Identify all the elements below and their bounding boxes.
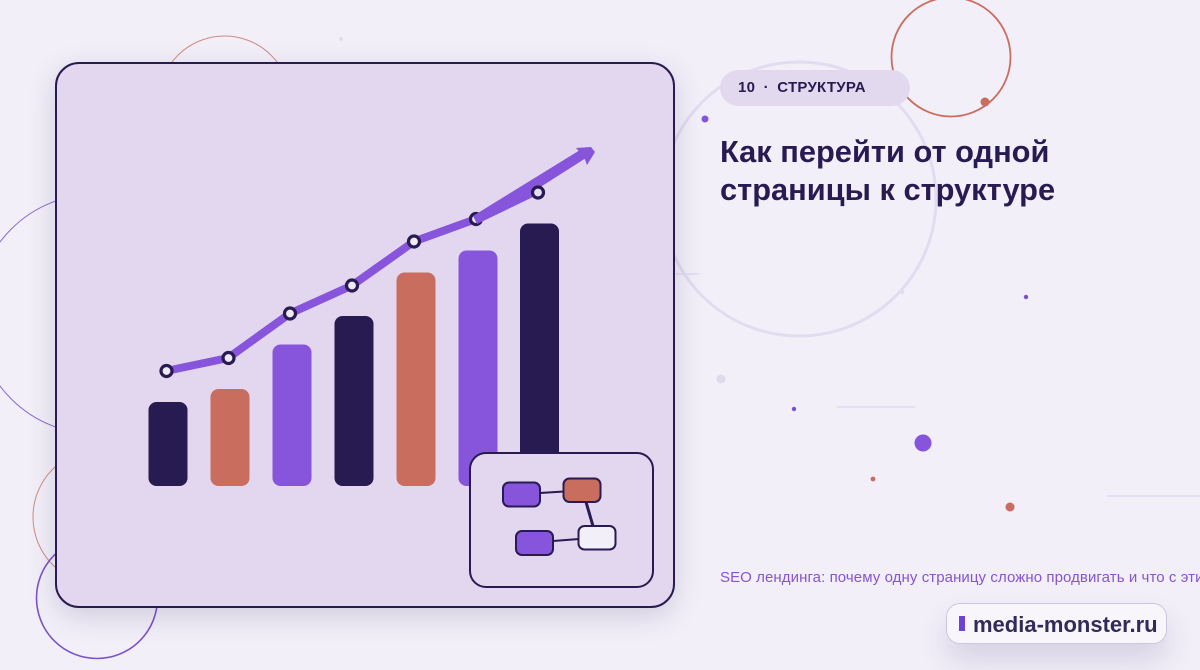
- panel: chart illustration: [55, 62, 675, 608]
- badge: section label: [720, 70, 910, 106]
- scattered dots: [339, 37, 1028, 512]
- nodes: [503, 478, 616, 555]
- purple circle left: [0, 194, 216, 434]
- coral circle behind panel top: [158, 36, 290, 168]
- title: страницы к структуре: [720, 172, 1055, 206]
- large lavender circle: [662, 62, 936, 336]
- trend markers: [161, 214, 482, 376]
- bars: [148, 224, 559, 486]
- trend line: [166, 219, 476, 371]
- decorative lines: [676, 274, 1200, 496]
- brand label: [946, 603, 1167, 644]
- title: [720, 134, 1055, 206]
- brand mark: [959, 616, 965, 631]
- last trend marker: [532, 187, 544, 198]
- inset: page structure: [470, 453, 653, 587]
- purple circle bottom left: [36, 538, 158, 658]
- brand name: media-monster.ru: [973, 612, 1158, 637]
- coral node on circle: [980, 98, 990, 106]
- coral circle top right: [892, 0, 1010, 116]
- coral circle left: [33, 449, 169, 585]
- trend arrow: [473, 147, 595, 224]
- badge: section label: 10 · СТРУКТУРА: [738, 79, 866, 96]
- title: Как перейти от одной: [720, 134, 1049, 169]
- connectors: [540, 492, 593, 541]
